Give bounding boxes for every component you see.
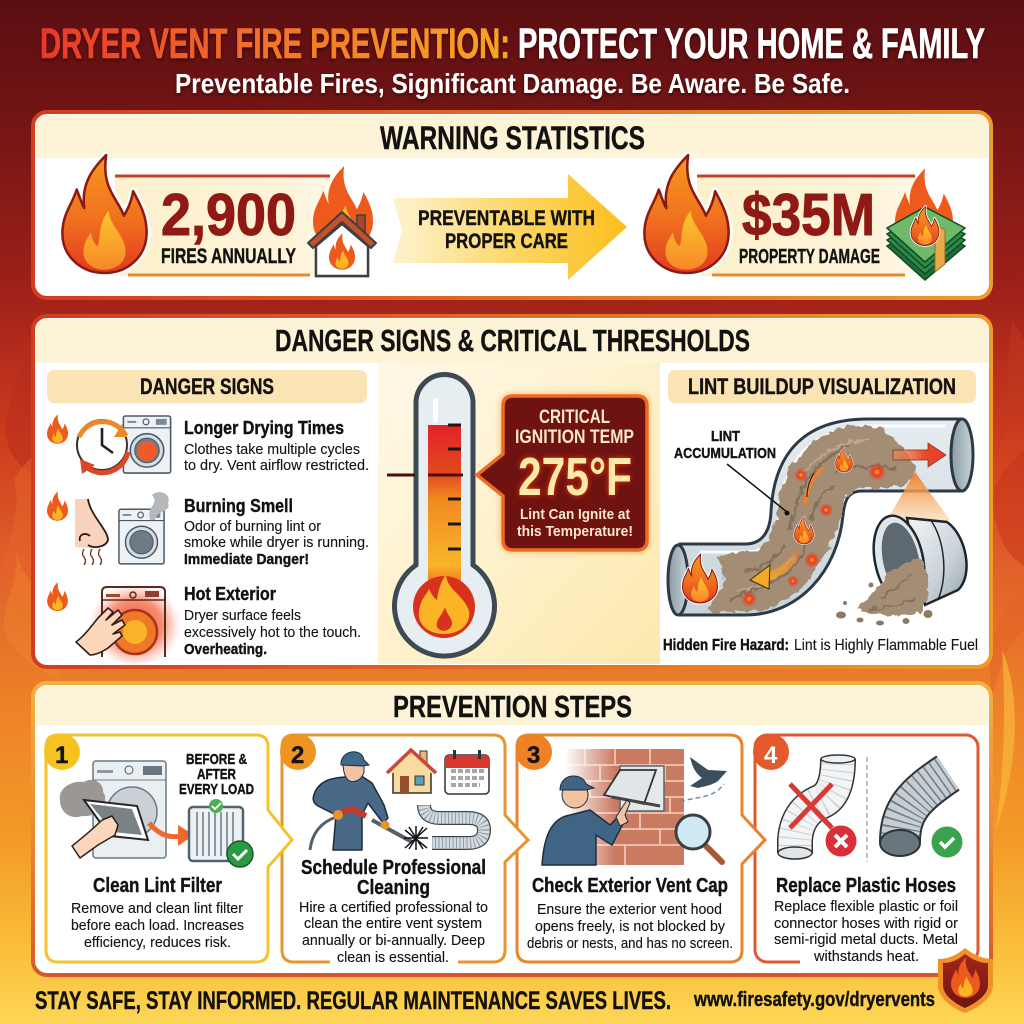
arrow: dashed bird path — [680, 784, 724, 802]
step 3: check exterior vent cap: opens freely, is not blocked by — [535, 918, 725, 935]
item: hot exterior: excessively hot to the touch. — [184, 624, 361, 641]
icon: large flame — [62, 155, 147, 273]
step 3: check exterior vent cap — [516, 734, 765, 962]
heading: danger signs and critical thresholds: DANGER SIGNS & CRITICAL THRESHOLDS — [275, 323, 750, 358]
item: hot exterior: Overheating. — [184, 641, 267, 658]
step 4: replace plastic hoses — [753, 734, 978, 966]
icon: calendar — [445, 750, 489, 794]
callout: critical ignition temp: IGNITION TEMP — [515, 427, 634, 448]
stat: $35M property damage: $35M — [742, 182, 875, 248]
step 3: check exterior vent cap: 3 — [527, 742, 540, 769]
callout: critical ignition temp: this Temperature! — [517, 523, 633, 540]
callout: critical ignition temp — [477, 393, 650, 553]
callout: critical ignition temp: 275°F — [518, 447, 632, 507]
icon: flexible duct — [424, 805, 484, 843]
column: danger signs — [47, 370, 369, 667]
icon: metal duct approved — [880, 773, 962, 858]
icon: magnifying glass — [676, 815, 722, 862]
stat: $35M property damage — [644, 155, 965, 280]
arrow: preventable with proper care: PROPER CARE — [445, 230, 568, 253]
item: burning smell: smoke while dryer is running. — [184, 534, 369, 551]
item: longer drying times: Clothes take multiple cycles — [184, 441, 360, 458]
label: before and after every load: AFTER — [197, 766, 236, 783]
step 2: schedule professional cleaning: annually or bi-annually. Deep — [302, 932, 485, 949]
subtitle: Preventable Fires, Significant Damage. Be Aware. Be Safe. — [175, 68, 850, 99]
icon: fire shield — [938, 948, 993, 1013]
title: DRYER VENT FIRE PREVENTION: — [40, 20, 510, 68]
step 1: clean lint filter: efficiency, reduces risk. — [84, 934, 231, 951]
column: lint buildup visualization — [663, 370, 978, 654]
item: hot exterior — [47, 582, 361, 667]
arrow: preventable with proper care — [393, 174, 627, 280]
step 2: schedule professional cleaning: 2 — [291, 742, 304, 769]
step 4: replace plastic hoses: 4 — [764, 742, 778, 769]
step 2: schedule professional cleaning: clean is essential. — [337, 949, 449, 966]
diagram: lint spilling from disconnected duct — [836, 472, 967, 626]
step 2: schedule professional cleaning: clean the entire vent system — [304, 915, 482, 932]
step 1: clean lint filter: before each load. Increases — [71, 917, 244, 934]
item: longer drying times — [47, 414, 369, 474]
step 4: replace plastic hoses: Replace Plastic Hoses — [776, 875, 956, 897]
footer: safety message: STAY SAFE, STAY INFORMED. REGULAR MAINTENANCE SAVES LIVES. — [35, 987, 671, 1015]
caption: hidden fire hazard — [663, 637, 978, 654]
item: burning smell: Odor of burning lint or — [184, 518, 321, 535]
icon: plastic hose crossed out — [778, 755, 856, 859]
step 4: replace plastic hoses: Replace flexible plastic or foil — [774, 898, 958, 915]
callout: critical ignition temp: CRITICAL — [539, 407, 610, 428]
icon: washer with lint filter — [60, 761, 194, 858]
item: hot exterior: Hot Exterior — [184, 584, 276, 604]
icon: technician with vent brush — [310, 752, 428, 850]
step 4: replace plastic hoses: withstands heat. — [813, 948, 919, 965]
arrow: preventable with proper care: PREVENTABLE WITH — [418, 207, 595, 230]
step 3: check exterior vent cap: Check Exterior Vent Cap — [532, 875, 728, 897]
step 4: replace plastic hoses: connector hoses with rigid or — [774, 915, 958, 932]
step 1: clean lint filter: 1 — [55, 742, 68, 769]
item: burning smell: Burning Smell — [184, 496, 293, 516]
heading: prevention steps: PREVENTION STEPS — [393, 689, 632, 724]
item: hot exterior: Dryer surface feels — [184, 607, 301, 624]
panel: warning statistics — [33, 112, 991, 298]
item: longer drying times: to dry. Vent airflow restricted. — [184, 457, 369, 474]
caption: hidden fire hazard: Hidden Fire Hazard: — [663, 637, 789, 654]
stat: $35M property damage: PROPERTY DAMAGE — [739, 246, 880, 268]
item: burning smell — [47, 491, 369, 568]
step 1: clean lint filter: Clean Lint Filter — [93, 875, 222, 897]
step 2: schedule professional cleaning — [280, 734, 528, 966]
arrow: airflow out — [893, 443, 946, 467]
callout: critical ignition temp: Lint Can Ignite at — [520, 506, 630, 523]
step 2: schedule professional cleaning: Cleaning — [357, 877, 430, 899]
step 3: check exterior vent cap: Ensure the exterior vent hood — [537, 901, 722, 918]
step 1: clean lint filter — [44, 734, 292, 962]
label: lint accumulation: ACCUMULATION — [674, 445, 776, 462]
lint mass — [712, 428, 913, 610]
step 1: clean lint filter: Remove and clean lint filter — [71, 900, 243, 917]
icon: bird — [690, 757, 727, 788]
icon: large flame — [644, 155, 729, 273]
column: lint buildup visualization: LINT BUILDUP VISUALIZATION — [688, 374, 956, 399]
step 3: check exterior vent cap: debris or nests, and has no screen. — [527, 935, 733, 952]
label: lint accumulation: LINT — [711, 428, 740, 445]
step 2: schedule professional cleaning: Hire a certified professional to — [299, 899, 488, 916]
icon: person inspecting vent — [542, 776, 630, 865]
step 4: replace plastic hoses: semi-rigid metal ducts. Metal — [774, 931, 958, 948]
label: before and after every load — [179, 751, 254, 798]
caption: hidden fire hazard: Lint is Highly Flammable Fuel — [794, 637, 978, 654]
item: longer drying times: Longer Drying Times — [184, 418, 344, 438]
label: lint accumulation — [674, 428, 790, 516]
panel: danger signs and critical thresholds — [33, 316, 991, 667]
column: danger signs: DANGER SIGNS — [140, 374, 274, 399]
arrow: lint direction — [750, 552, 798, 589]
footer: website: www.firesafety.gov/dryervents — [693, 989, 935, 1011]
stat: 2,900 fires annually: FIRES ANNUALLY — [161, 245, 296, 268]
step 2: schedule professional cleaning: Schedule Professional — [301, 857, 486, 879]
label: before and after every load: BEFORE & — [186, 751, 247, 768]
diagram: vent pipe clogged with lint — [668, 419, 973, 615]
stat: 2,900 fires annually — [62, 155, 376, 276]
icon: burning money stack — [887, 168, 965, 280]
callout: critical ignition temp: 275°F — [518, 447, 632, 507]
icon: house on fire — [308, 166, 376, 276]
icon: brick wall with vent hood — [565, 749, 684, 865]
icon: house — [387, 750, 436, 793]
label: before and after every load: EVERY LOAD — [179, 781, 254, 798]
stat: 2,900 fires annually: 2,900 — [161, 182, 296, 248]
icon: clean filter with check — [189, 799, 253, 867]
panel: prevention steps — [33, 683, 991, 975]
item: burning smell: Immediate Danger! — [184, 551, 309, 568]
chart: thermometer at 275°F — [387, 374, 494, 656]
heading: warning statistics: WARNING STATISTICS — [380, 120, 645, 156]
